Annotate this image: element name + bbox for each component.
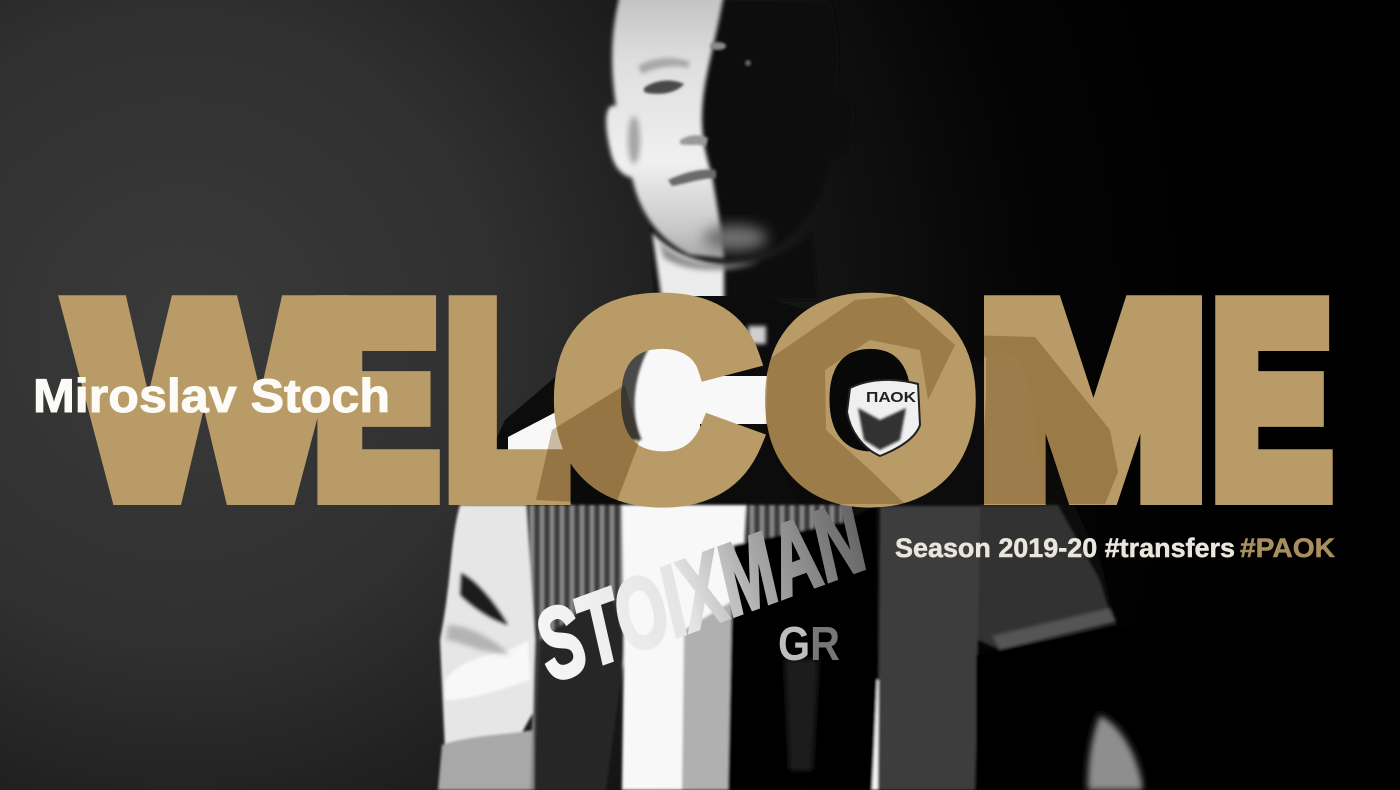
hairy forearm	[1088, 716, 1143, 790]
right body panel	[878, 506, 985, 790]
dark stripe	[526, 505, 630, 790]
heading: WELCOME: O	[767, 250, 974, 549]
white shirt inside letters	[508, 345, 768, 452]
white stripe	[622, 505, 746, 790]
badge name: ΠΑΟΚ	[866, 389, 916, 406]
black centre stripe	[728, 506, 880, 790]
heading: WELCOME: E	[314, 250, 438, 549]
white piping	[872, 680, 880, 790]
lit side of neck	[652, 232, 724, 302]
shirt sponsor: STOIXMAN	[521, 481, 880, 703]
left forearm	[438, 730, 533, 790]
season caption: Season 2019-20 #transfers	[895, 533, 1235, 563]
left sleeve	[440, 505, 540, 750]
right sleeve	[978, 505, 1112, 650]
heading: WELCOME: L	[445, 250, 567, 549]
player head	[606, 0, 854, 302]
player photo	[438, 0, 1162, 790]
translucent arm overlay on letters	[536, 296, 1118, 504]
badge eagle	[858, 408, 906, 450]
player name: Miroslav Stoch	[33, 369, 390, 422]
player shoulders behind the lettering	[465, 296, 1120, 640]
lit side of face	[606, 0, 724, 258]
heading: WELCOME: E	[1212, 250, 1331, 549]
club badge	[847, 380, 920, 456]
jersey	[438, 505, 1162, 790]
face details	[628, 42, 767, 251]
heading: WELCOME: C	[556, 250, 756, 549]
shirt sponsor suffix: GR	[778, 618, 840, 671]
right arm and armband	[976, 625, 1162, 790]
striped collar zone	[746, 505, 843, 545]
heading: WELCOME: M	[979, 250, 1207, 549]
hashtag PAOK: #PAOK	[1240, 533, 1336, 563]
heading: WELCOME: W	[75, 250, 336, 549]
